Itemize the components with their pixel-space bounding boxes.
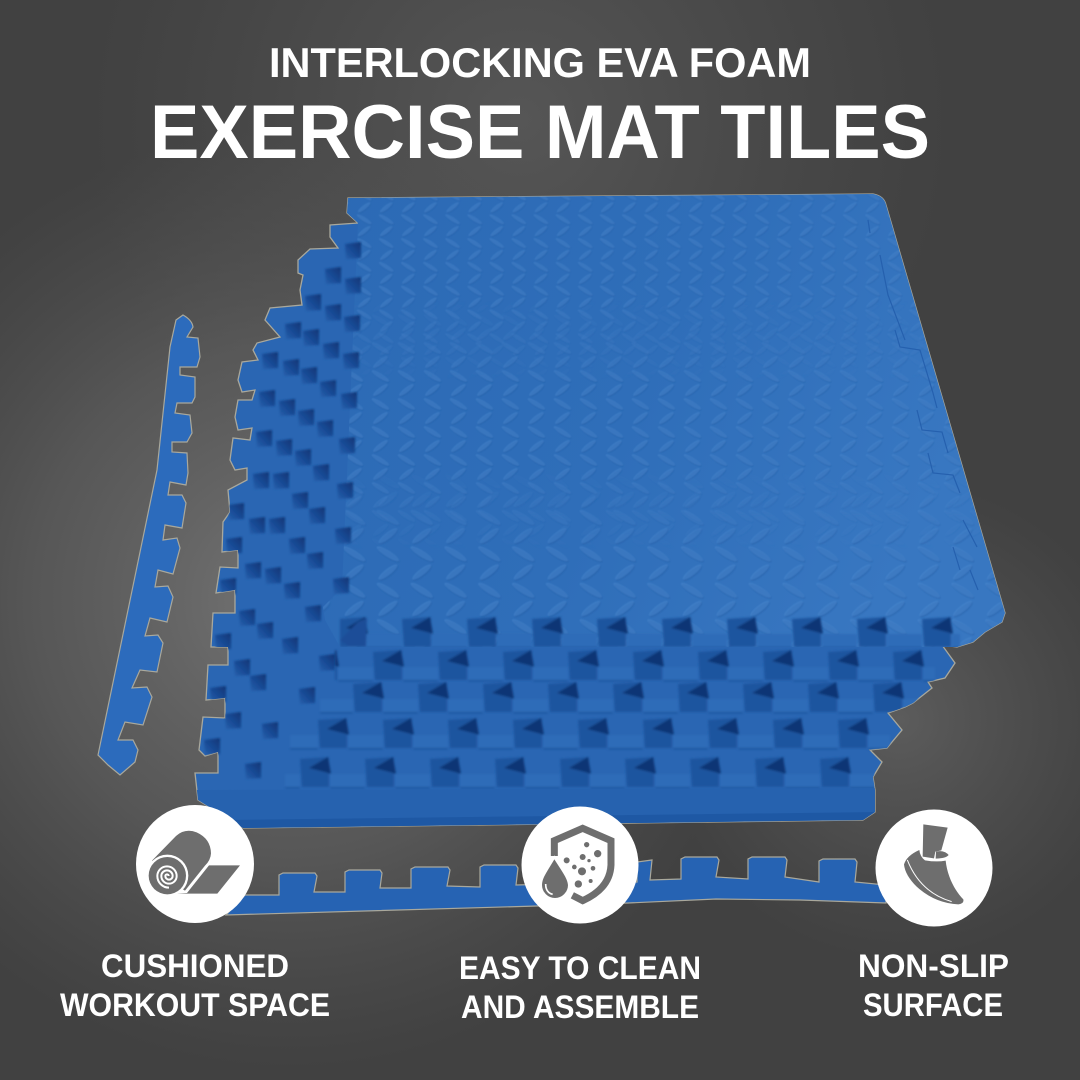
title line 1: INTERLOCKING EVA FOAM [269,39,811,86]
top tile surface [323,194,1005,647]
label: cushioned workout space: CUSHIONED [101,948,289,984]
feature: non-slip surface [858,810,1009,1023]
icon: shield and water drop [522,806,638,924]
label: non-slip surface: SURFACE [863,987,1003,1023]
title [150,39,930,175]
top tile left edge notches [333,242,361,594]
stack silhouette [195,194,1005,828]
top tile front teeth [340,617,960,649]
feature: cushioned workout space [60,805,330,1023]
icon: shoe and sock [876,810,992,926]
title line 2: EXERCISE MAT TILES [150,90,930,175]
feature: easy to clean and assemble [459,806,701,1025]
label: non-slip surface: NON-SLIP [858,948,1009,984]
label: cushioned workout space: WORKOUT SPACE [60,987,330,1023]
top tile chevron texture [320,190,1020,650]
bottom tile front edge [195,788,880,830]
stack left side interlocking notches [204,267,341,779]
loose border strip: bottom [226,857,886,915]
product: stacked blue foam mat tiles [195,190,1020,830]
label: cushioned workout space [60,948,330,1023]
right side seam lines [868,220,978,590]
label: easy to clean and assemble [459,950,701,1025]
loose border strip: left [98,315,200,775]
stack front rows of interlocking teeth [285,650,935,789]
label: easy to clean and assemble: EASY TO CLEAN [459,950,701,986]
label: non-slip surface [858,948,1009,1023]
icon: rolled mat [136,805,254,923]
label: easy to clean and assemble: AND ASSEMBLE [461,989,699,1025]
